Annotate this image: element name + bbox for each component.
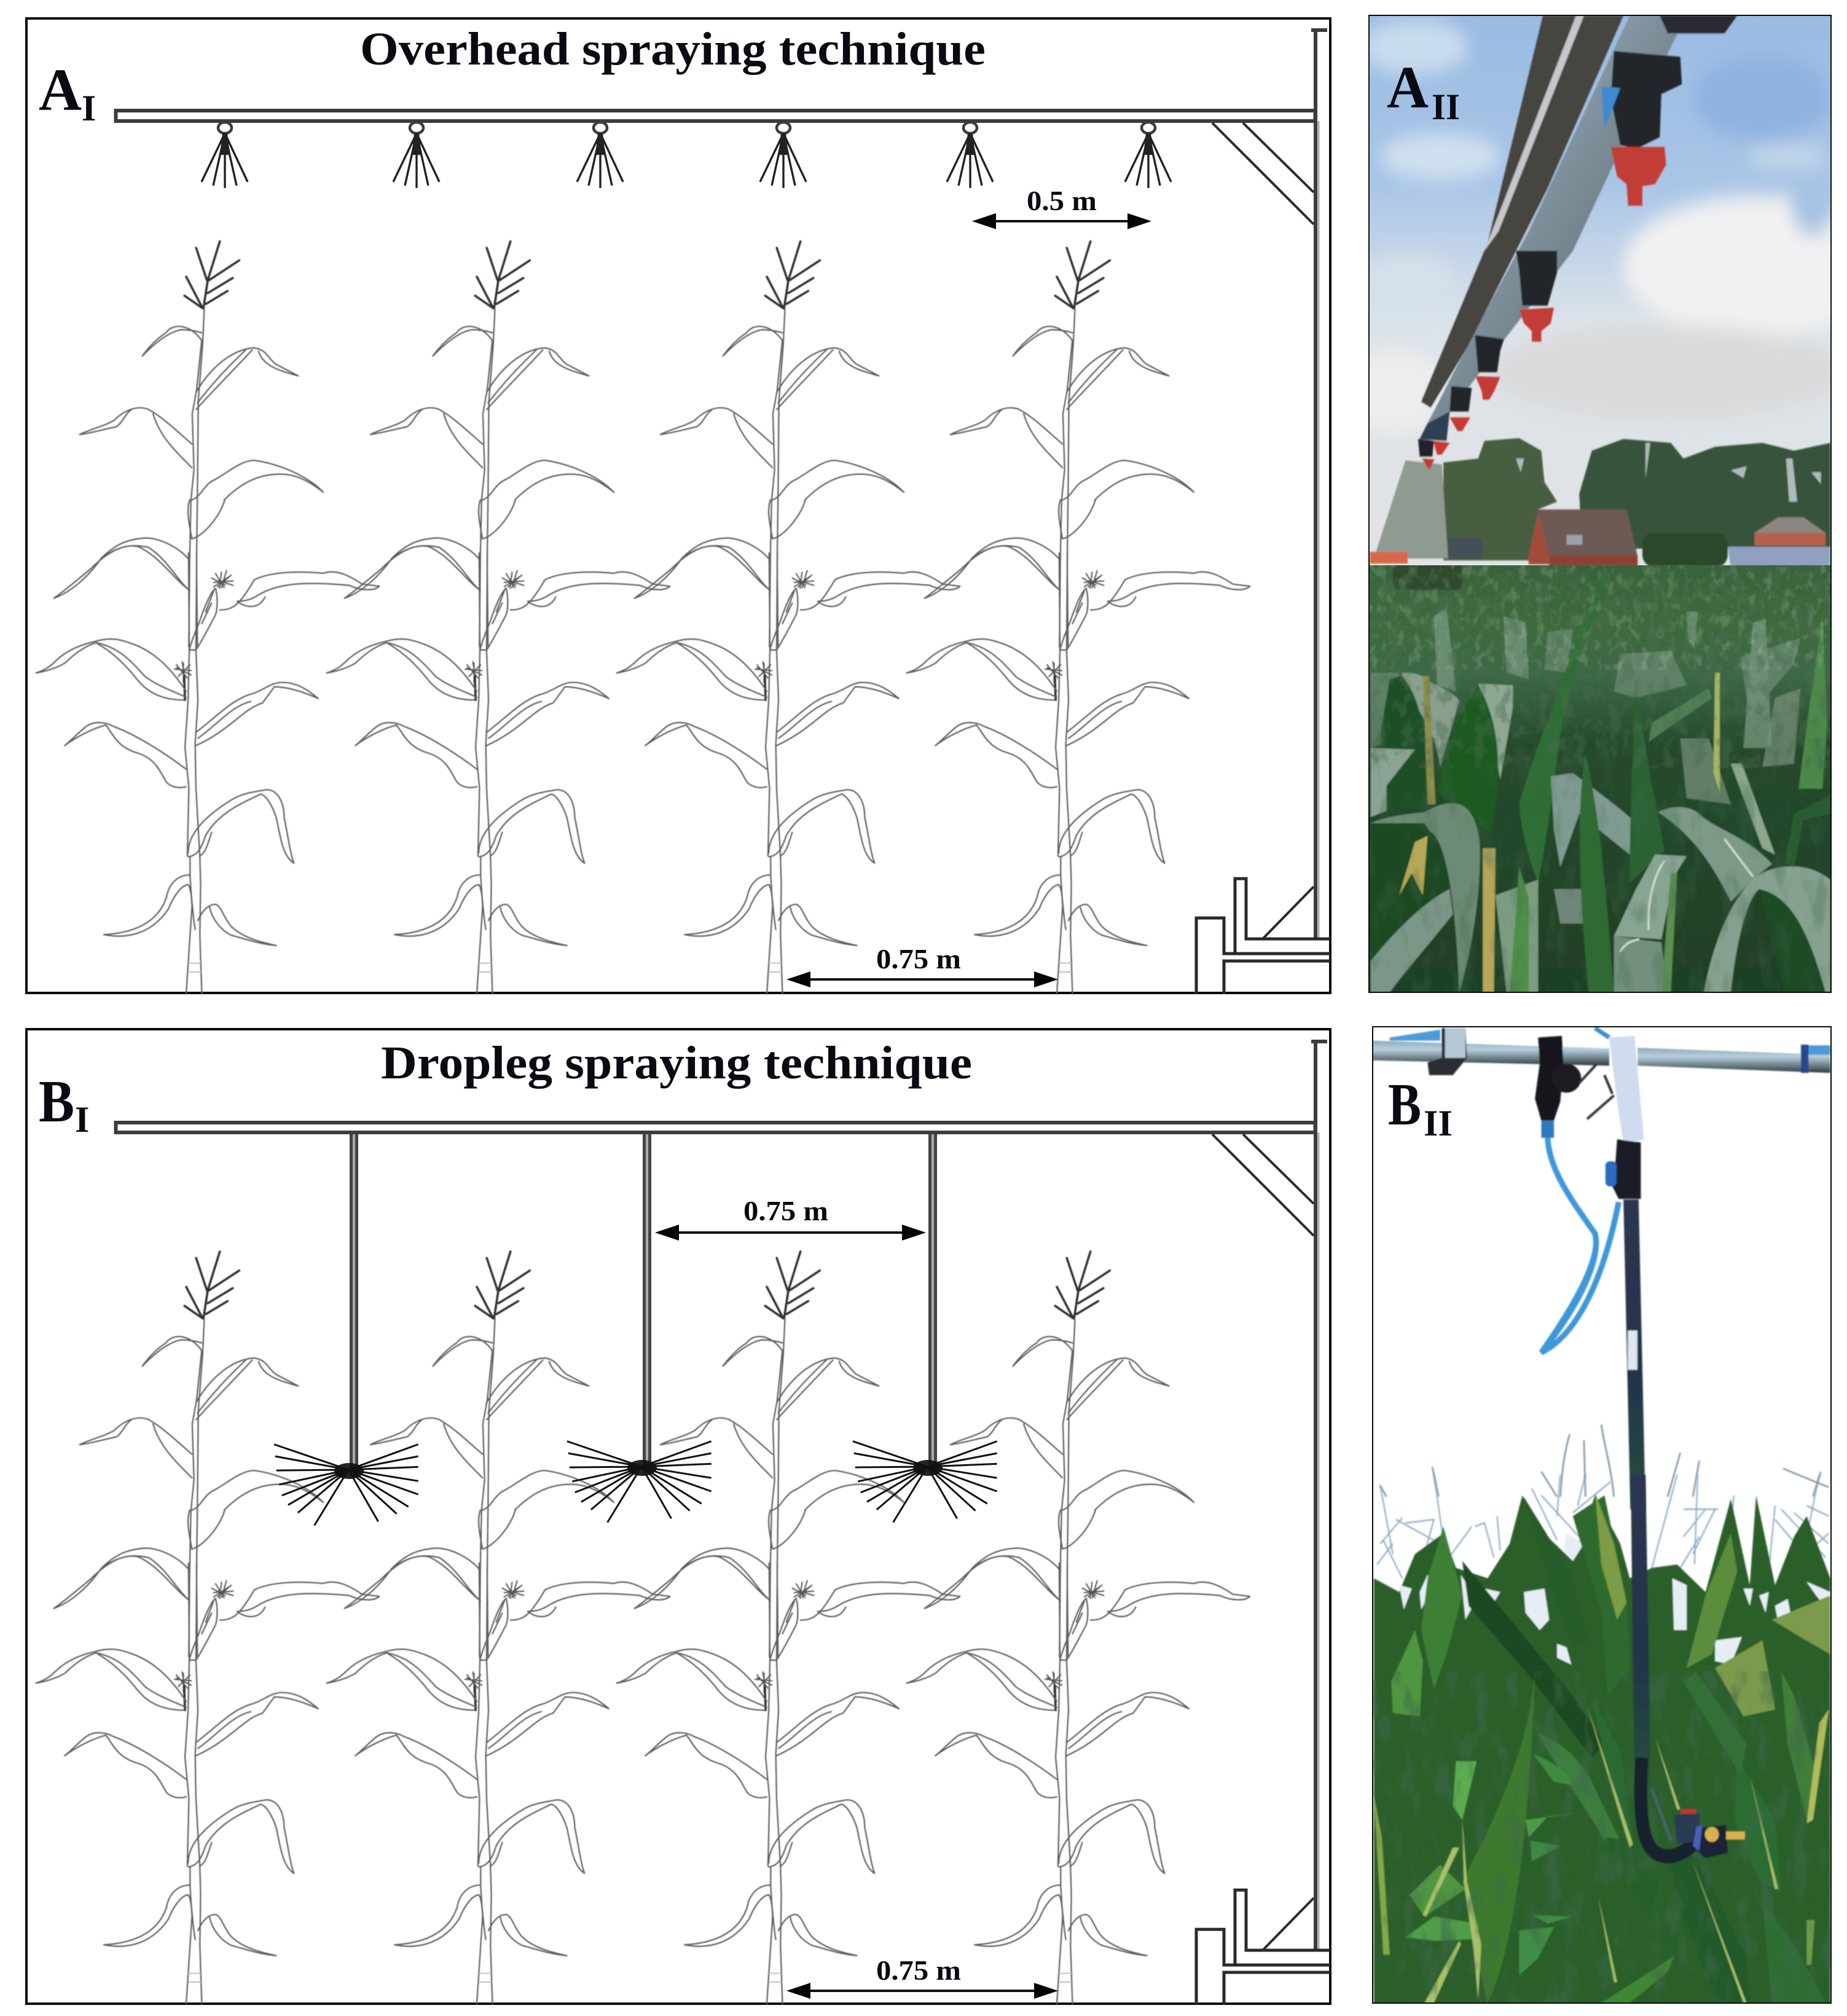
dropleg 3 [853,1134,997,1523]
nozzle spacing arrow 0.5 m [972,185,1151,229]
nozzle 6 [1125,122,1171,188]
maize plant 1 [36,241,379,994]
maize field [1368,547,1835,995]
title: overhead: Overhead spraying technique [360,23,986,75]
maize plant 2 [327,241,670,994]
label AI: A [39,57,82,124]
panel BI: dropleg spraying schematic [26,1029,1330,2004]
label AII [1387,55,1460,127]
maize plant 2 [327,1252,670,2004]
maize plant 1 [36,1252,379,2004]
sky [1343,16,1847,569]
photo BII: dropleg hanging in maize canopy [1372,1026,1832,2006]
dropleg spacing arrow 0.75 m [655,1195,926,1241]
dropleg 2 [567,1134,712,1523]
label BII: B [1388,1072,1421,1138]
label BII [1388,1072,1453,1143]
title: dropleg: Dropleg spraying technique [381,1037,972,1089]
photo AII: overhead boom above maize field [1343,15,1847,995]
dropleg spacing arrow 0.75 m: 0.75 m [743,1195,828,1226]
nozzle 1 [202,122,248,188]
label AII: A [1387,55,1429,121]
maize canopy [1374,1475,1830,2006]
nozzle 2 [393,122,439,188]
nozzle 5 [947,122,993,188]
maize plant 4 [907,1252,1250,2004]
panel AI: overhead spraying schematic [26,18,1330,994]
nozzle 4 [760,122,806,188]
lower dropleg and nozzle [1631,1475,1745,1858]
label AII: II [1432,87,1460,127]
maize plant 4 [907,241,1250,994]
boom and nozzles [1418,16,1737,469]
sprayer vehicle frame [1196,879,1330,994]
canopy texture [1373,1671,1830,2002]
nozzle 3 [577,122,623,188]
trees, buildings and tower [1370,438,1830,573]
dropleg 1 [274,1134,418,1526]
boom with post and brace [116,29,1327,939]
label BI: B [39,1069,74,1135]
maize plant 3 [617,1252,960,2004]
row spacing arrow 0.75 m [786,1955,1058,1999]
nozzle spacing arrow 0.5 m: 0.5 m [1027,185,1097,216]
boom pipe, clamps and hose [1372,1028,1830,1509]
sprayer vehicle frame [1196,1890,1330,2004]
label BII: II [1424,1103,1453,1143]
row spacing arrow 0.75 m [786,943,1058,987]
label AI: I [82,88,96,128]
maize plant 3 [617,241,960,994]
label BI: I [75,1099,89,1140]
boom with post and brace [116,1041,1327,1950]
row spacing arrow 0.75 m: 0.75 m [876,943,961,975]
row spacing arrow 0.75 m: 0.75 m [876,1955,961,1986]
